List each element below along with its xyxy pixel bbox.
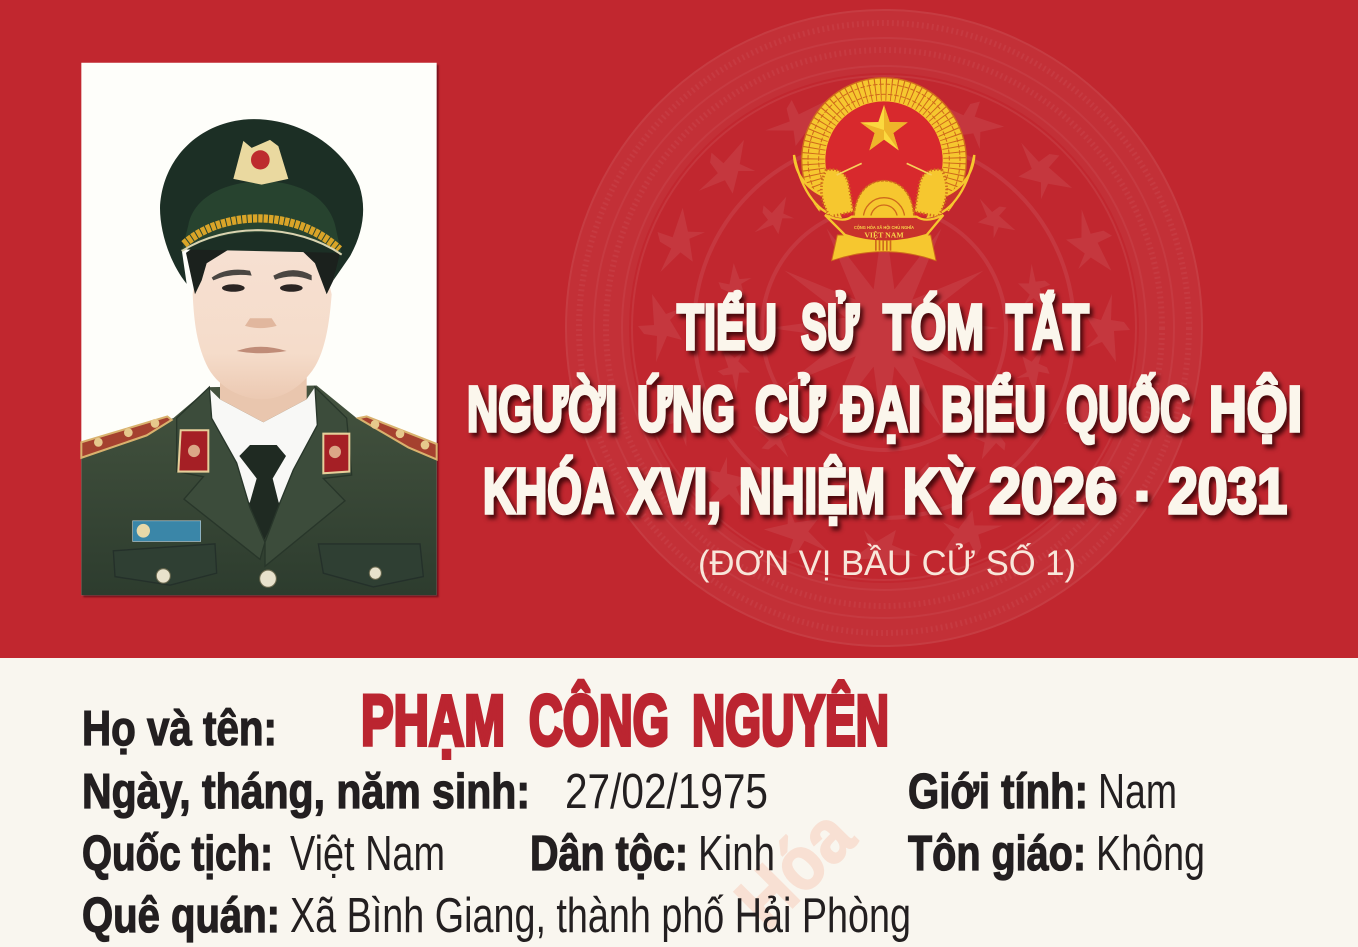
candidate details [82,681,1205,943]
right wheat [915,170,947,217]
title line 3: XVI, [628,455,721,527]
name row [82,681,889,761]
birth date and gender row: 27/02/1975 [565,765,768,819]
hometown row [82,889,911,943]
left tab badge [188,445,200,457]
base [832,235,936,261]
left lapel [177,387,265,559]
title line 1 [677,290,1089,363]
hair left [186,243,240,294]
nose [245,318,277,328]
nationality, ethnicity and religion row: Quốc tịch: [82,827,273,881]
title line 3: KHÓA [483,455,614,527]
candidate name: PHẠM [361,682,505,761]
shirt collar [209,387,317,503]
photo background [81,63,437,595]
nationality, ethnicity and religion row: Việt Nam [290,827,445,881]
left epaulette stars [94,419,159,447]
title line 2: NGƯỜI [467,373,617,445]
birth date and gender row [82,765,1177,819]
name tag crest [137,524,150,538]
right epaulette [358,416,437,460]
title line 2: ĐẠI [841,373,921,445]
faint watermark on bottom panel: Hóa [720,793,871,944]
candidate name [361,681,889,761]
subtitle: (ĐƠN VỊ BẦU CỬ SỐ 1) [698,543,1076,583]
cap band [182,181,342,255]
header background [0,0,1358,658]
cap visor edge [182,230,342,255]
cap gold cord [184,218,339,249]
birth date and gender row: Nam [1098,765,1177,819]
left ribbon [794,155,840,217]
hometown row: Quê quán: [82,889,280,943]
bottom panel background [0,658,1358,947]
wheat stalks [837,163,932,175]
name row: Họ và tên: [82,702,277,756]
right lapel [265,387,352,566]
right pocket [318,544,423,587]
cap badge [233,140,288,185]
cap crown [160,119,363,284]
title line 2: QUỐC [1066,373,1190,445]
left wheat [821,170,853,217]
nationality, ethnicity and religion row: Không [1096,827,1205,881]
uniform jacket [81,385,437,595]
right epaulette stars [371,420,429,450]
birth date and gender row: Ngày, tháng, năm sinh: [82,765,530,819]
hometown row: Xã Bình Giang, thành phố Hải Phòng [290,889,911,943]
neck [220,370,307,422]
title line 3: 2026 [989,455,1117,527]
left epaulette [81,416,172,458]
title line 2 [467,372,1302,445]
banner motto: CỘNG HÒA XÃ HỘI CHỦ NGHĨA [854,225,915,230]
hair right [293,239,340,294]
bronze drum watermark [566,10,1202,646]
title line 1: TIỂU [677,290,777,363]
name tag [133,521,201,541]
title line 1: TẮT [1006,290,1089,363]
nationality, ethnicity and religion row [82,827,1205,881]
wheat ring [813,89,955,204]
star shading [860,105,908,150]
title line 2: HỘI [1209,372,1302,445]
banner text: VIỆT NAM [864,232,904,240]
candidate name: NGUYÊN [692,681,889,761]
title line 3 [483,454,1287,527]
title line 3: NHIỆM [739,454,885,527]
emblem disc lower fill [830,170,938,217]
title line 2: ỨNG [637,373,735,445]
candidate name: CÔNG [529,681,669,761]
title line 3: KỲ [903,455,974,527]
title [467,290,1302,527]
national emblem [794,78,974,261]
star [860,105,908,150]
portrait photo [81,63,439,597]
right tab badge [329,446,341,458]
title line 2: CỬ [755,372,826,445]
gear [854,181,914,220]
necktie [239,445,286,540]
title line 1: TÓM [883,291,984,363]
buttons [156,567,381,587]
nationality, ethnicity and religion row: Tôn giáo: [908,827,1086,881]
eyes [222,284,303,292]
title line 3: 2031 [1168,455,1287,527]
title line 2: BIỂU [941,372,1046,445]
mouth [237,347,287,353]
nationality, ethnicity and religion row: Kinh [698,827,775,881]
right ribbon [928,155,974,217]
nationality, ethnicity and religion row: Dân tộc: [530,827,688,881]
gear rings [863,198,905,218]
photo shadow [83,65,439,597]
banner [825,215,943,242]
emblem red disc [822,98,946,222]
left pocket [113,544,217,585]
cap badge red centre [251,150,270,170]
right collar tab [323,434,349,473]
eyebrows [212,270,312,280]
base pillars [875,240,891,251]
birth date and gender row: Giới tính: [908,765,1088,819]
title line 1: SỬ [801,290,860,363]
face [193,246,332,399]
left collar tab [178,430,208,472]
title line 3: - [1136,455,1148,527]
wheat ring texture [802,78,966,204]
